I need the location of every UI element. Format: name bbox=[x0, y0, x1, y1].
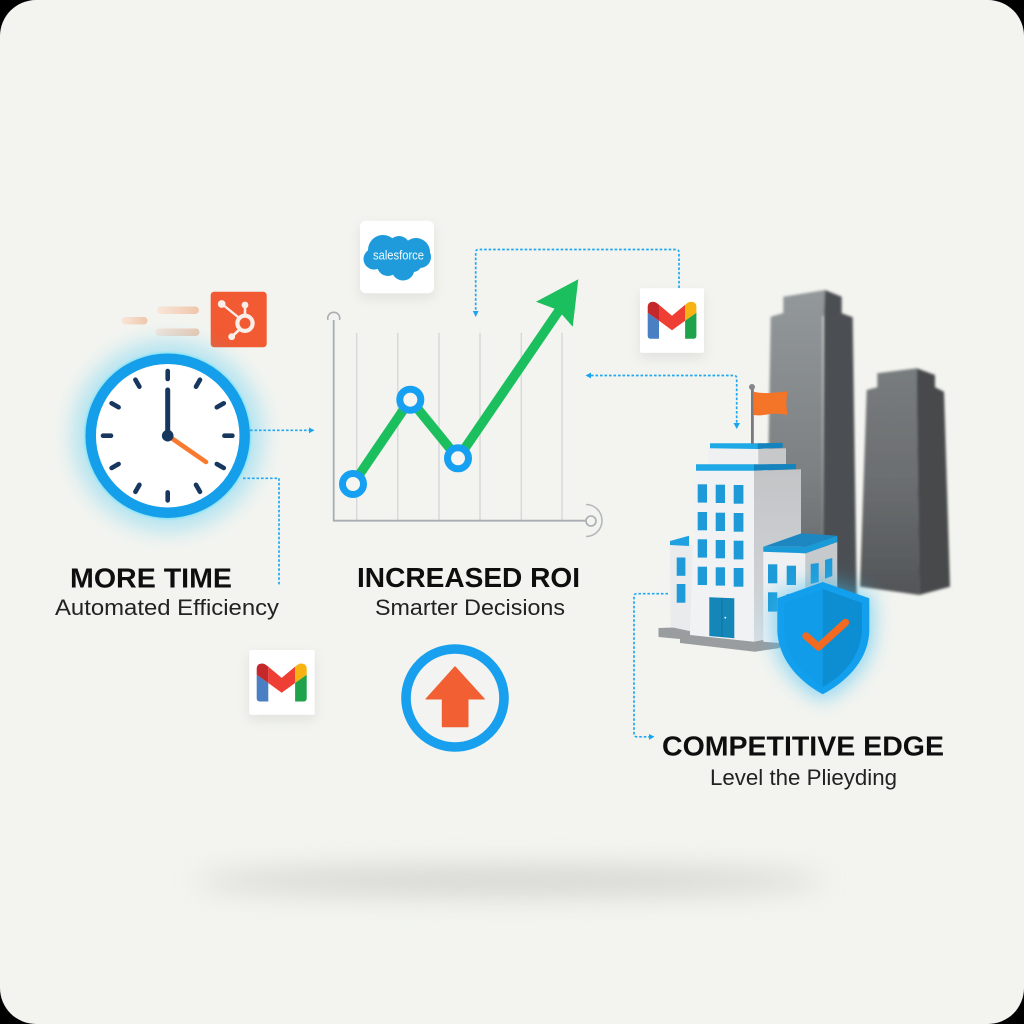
icon: up arrow circle bbox=[406, 649, 504, 747]
arrow: clock to chart bbox=[250, 428, 314, 433]
line chart bbox=[328, 279, 602, 536]
flag bbox=[749, 384, 788, 444]
clock section bbox=[55, 292, 314, 620]
icon: salesforce tile: salesforce bbox=[373, 248, 424, 262]
speed lines bbox=[122, 306, 200, 336]
arrow: growth line bbox=[353, 279, 578, 484]
ground shadow bbox=[195, 867, 825, 895]
competitive edge section bbox=[634, 290, 950, 790]
main tower body bbox=[690, 443, 801, 642]
text: level the plieyding: Level the Plieyding bbox=[710, 765, 897, 790]
icon: salesforce tile bbox=[360, 221, 434, 293]
text: smarter decisions: Smarter Decisions bbox=[375, 595, 565, 620]
building base bbox=[658, 627, 780, 652]
icon: gmail tile left bbox=[249, 650, 315, 715]
background towers bbox=[766, 290, 950, 597]
icon: shield with check bbox=[773, 578, 873, 700]
icon: hubspot tile bbox=[211, 292, 267, 347]
connector: gmail to chart bbox=[473, 250, 679, 317]
left wing bbox=[670, 536, 694, 632]
icon: gmail tile right bbox=[640, 288, 704, 353]
heading: competitive edge: COMPETITIVE EDGE bbox=[662, 730, 944, 762]
building bbox=[658, 384, 837, 652]
connector: clock to label bbox=[243, 478, 279, 585]
heading: increased roi: INCREASED ROI bbox=[357, 562, 580, 593]
heading: more time: MORE TIME bbox=[70, 562, 232, 594]
data points bbox=[342, 389, 468, 494]
connector: building to chart bbox=[586, 373, 740, 429]
right wing bbox=[763, 533, 837, 645]
connector: building to label bbox=[634, 594, 668, 740]
text: automated efficiency: Automated Efficiency bbox=[55, 595, 279, 620]
door bbox=[709, 597, 734, 638]
chart section bbox=[249, 221, 740, 747]
icon: clock bbox=[72, 340, 264, 532]
